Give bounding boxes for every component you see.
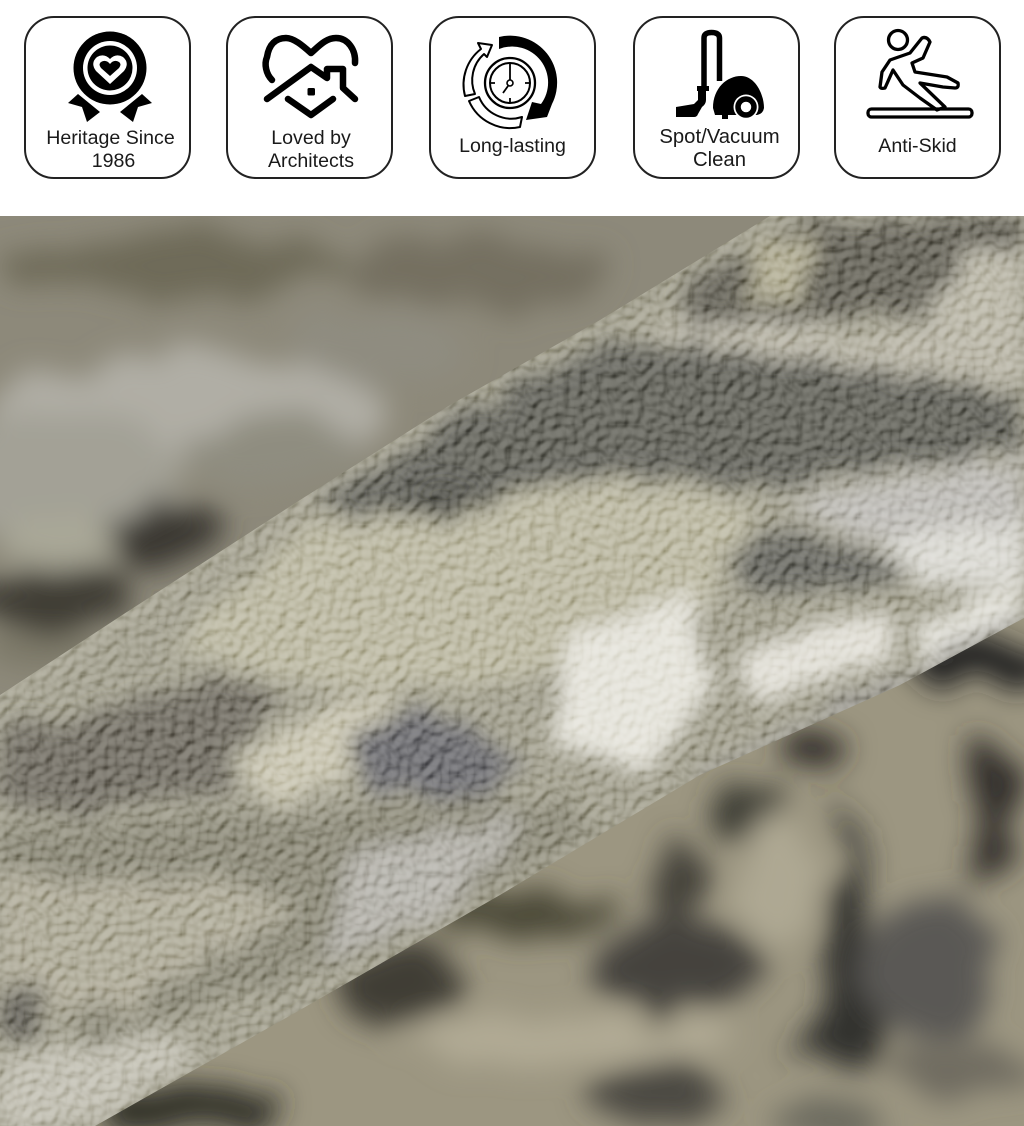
badge: Loved by Architects: [226, 16, 393, 179]
label: Heritage Since: [46, 126, 175, 148]
badge: Heritage Since 1986: [24, 16, 191, 179]
label: [659, 126, 780, 170]
label: Loved by: [271, 126, 351, 148]
label: [268, 126, 354, 172]
icon: person slipping on floor: [866, 28, 974, 119]
icon: vacuum cleaner: [676, 30, 764, 119]
label: 1986: [92, 150, 135, 172]
background: blurred lower rug: [80, 600, 1024, 1126]
icon: clock with circular arrows: [462, 36, 558, 130]
sheen along upper edge: [30, 420, 433, 682]
label: Long-lasting: [459, 134, 566, 156]
label: Anti-Skid: [878, 134, 957, 156]
icon: heart and house: [262, 34, 358, 118]
label: Spot/Vacuum: [659, 126, 780, 148]
label: Clean: [693, 148, 746, 170]
badge: Spot/Vacuum Clean: [633, 16, 800, 179]
icon: award rosette with heart: [68, 32, 152, 122]
badge: Long-lasting: [429, 16, 596, 179]
label: [46, 126, 175, 172]
label: Architects: [268, 150, 354, 172]
badge: Anti-Skid: [834, 16, 1001, 179]
